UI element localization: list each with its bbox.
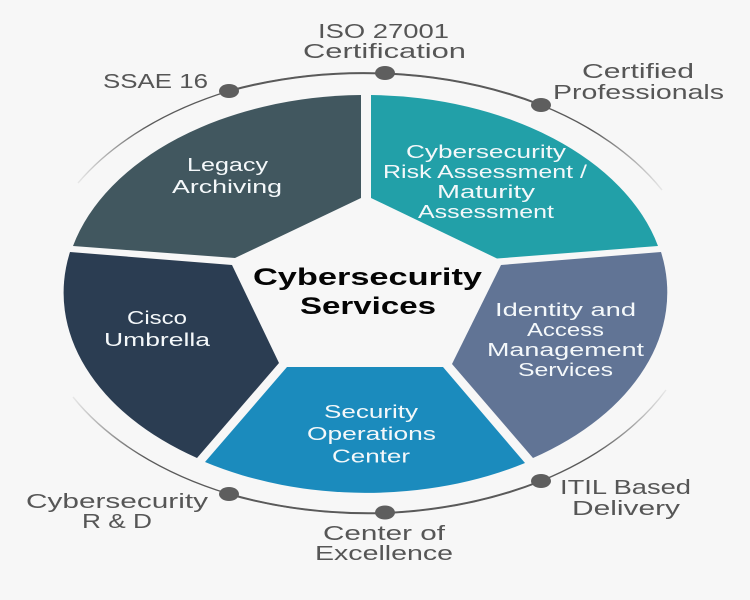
label: cybersecurity R and D (26, 487, 239, 533)
segment: security operations center (205, 367, 525, 493)
segment: security operations center: Operations (307, 423, 436, 444)
center title: Cybersecurity (253, 264, 483, 291)
segment: identity and access management: Identity and (495, 299, 636, 320)
outer ring: bottom arc (73, 390, 666, 513)
label: cybersecurity R and D: R & D (82, 510, 152, 533)
label: SSAE 16 (103, 70, 239, 98)
segment: identity and access management: Access (527, 319, 604, 340)
label: center of excellence: Center of (323, 522, 445, 545)
label: certified professionals: Professionals (553, 81, 724, 104)
segment: risk assessment (371, 95, 658, 258)
label: center of excellence (315, 506, 453, 565)
segment: legacy archiving: Legacy (187, 154, 269, 175)
label: certified professionals: Certified (582, 60, 694, 83)
center title: Services (300, 293, 436, 320)
segment: risk assessment: Assessment (418, 201, 554, 222)
segment: identity and access management: Management (487, 339, 644, 360)
label: ISO 27001 certification: Certification (303, 40, 466, 63)
segment: identity and access management (452, 252, 667, 458)
segment: cisco umbrella: Cisco (127, 307, 187, 328)
segment: legacy archiving (73, 95, 361, 258)
label: certified professionals (531, 60, 724, 112)
center title (253, 264, 483, 320)
label: ISO 27001 certification (303, 20, 466, 80)
label: cybersecurity R and D: Cybersecurity (26, 490, 209, 513)
segment: cisco umbrella (64, 252, 279, 458)
segment: risk assessment: Maturity (437, 181, 536, 202)
segment: cisco umbrella: Umbrella (104, 329, 211, 350)
segment: security operations center: Center (332, 446, 410, 466)
label: center of excellence: Excellence (315, 542, 453, 565)
segment: risk assessment: Cybersecurity (406, 141, 567, 162)
label: ITIL based delivery (531, 474, 691, 520)
label: ITIL based delivery: ITIL Based (560, 476, 691, 499)
label: ITIL based delivery: Delivery (572, 497, 681, 520)
segment: risk assessment: Risk Assessment / (383, 161, 588, 182)
label: ISO 27001 certification: ISO 27001 (318, 20, 449, 43)
label: SSAE 16: SSAE 16 (103, 70, 208, 93)
segment: security operations center: Security (324, 401, 419, 422)
segment: legacy archiving: Archiving (172, 176, 282, 197)
outer ring: top arc (78, 73, 662, 190)
segment: identity and access management: Services (518, 359, 613, 380)
